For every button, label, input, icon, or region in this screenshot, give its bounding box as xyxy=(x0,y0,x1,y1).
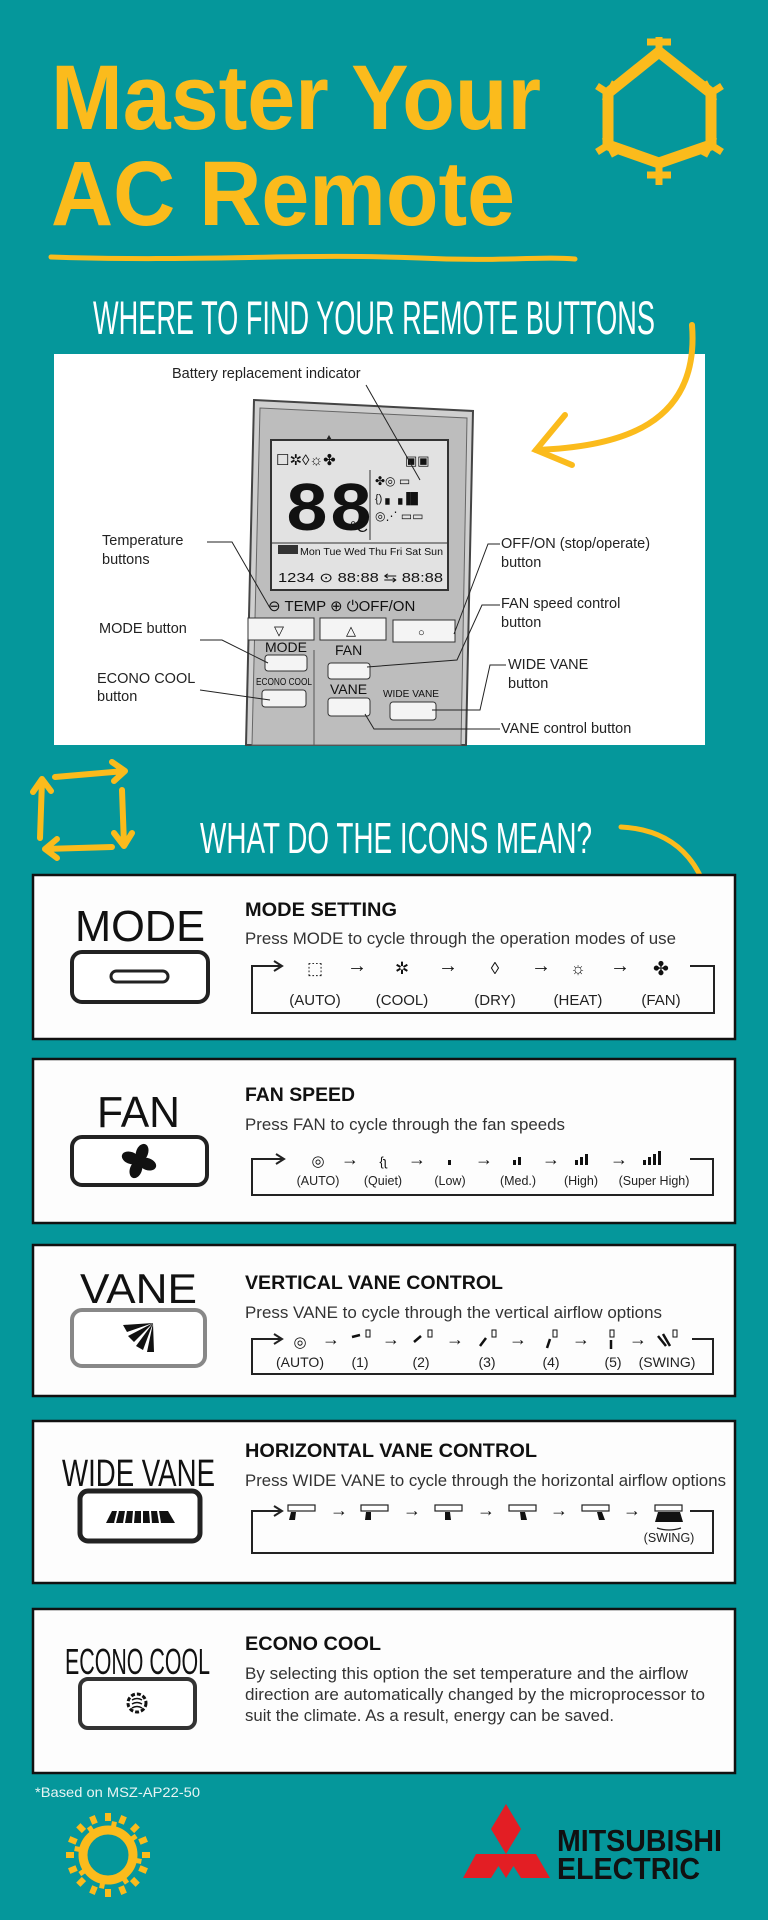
icon: sun xyxy=(66,1813,150,1897)
remote body: ☐✲◊☼✤ xyxy=(276,452,336,469)
mode button icon xyxy=(72,902,208,1002)
mode flow: → xyxy=(610,955,630,977)
mode button icon: MODE xyxy=(75,902,205,951)
fan flow: (Super High) xyxy=(619,1174,689,1188)
fan flow: → xyxy=(542,1149,560,1169)
mode flow: ✤ xyxy=(653,959,669,980)
callout labels: Temperature xyxy=(102,533,183,549)
remote body: ECONO COOL xyxy=(256,677,312,688)
panel: econo cool xyxy=(33,1609,735,1773)
wide vane flow: → xyxy=(550,1500,568,1520)
remote logo: MITSUBISHI xyxy=(354,442,400,451)
wide vane flow: (SWING) xyxy=(644,1531,694,1545)
mode flow: (COOL) xyxy=(376,992,428,1009)
panel: remote diagram xyxy=(54,354,705,745)
callout labels: button xyxy=(501,615,541,631)
remote body: 1234 ⊙ 88:88 ⇆ 88:88 xyxy=(278,570,443,585)
remote body: ◎⋰ ▭▭ xyxy=(375,509,423,523)
remote body: ▽ xyxy=(274,623,284,638)
vane flow: (4) xyxy=(542,1354,560,1370)
remote body: ✤◎ ▭ xyxy=(375,474,410,488)
vane flow xyxy=(252,1329,713,1374)
callout labels: WIDE VANE xyxy=(508,657,589,673)
panel: fan speed: Press FAN to cycle through the fan speeds xyxy=(245,1116,565,1134)
panel: vertical vane control xyxy=(33,1245,735,1396)
callout labels: OFF/ON (stop/operate) xyxy=(501,536,650,552)
vane flow: (2) xyxy=(412,1354,430,1370)
mode flow: (AUTO) xyxy=(289,992,341,1009)
fan flow: (Quiet) xyxy=(364,1174,402,1188)
callout labels: buttons xyxy=(102,552,150,568)
fan text: FAN SPEED xyxy=(245,1085,355,1106)
remote body: VANE xyxy=(330,681,367,697)
callout labels: button xyxy=(501,555,541,571)
remote body xyxy=(246,400,473,745)
callout labels: button xyxy=(97,689,137,705)
panel: horizontal vane control: Press WIDE VANE to cycle through the horizontal airflow options xyxy=(245,1472,726,1490)
arrow: curved pointing to remote xyxy=(536,325,693,465)
vane flow: (AUTO) xyxy=(276,1354,324,1370)
wide vane flow: → xyxy=(623,1500,641,1520)
wide vane flow xyxy=(252,1500,713,1553)
remote body: ○ xyxy=(418,627,425,639)
vane flow: (1) xyxy=(351,1354,369,1370)
vane button icon: VANE xyxy=(80,1265,197,1312)
panel: econo cool: direction are automatically changed by the microprocessor to xyxy=(245,1686,705,1704)
callout labels: Battery replacement indicator xyxy=(172,366,361,382)
mode flow: ☼ xyxy=(570,959,586,978)
vane flow: (5) xyxy=(604,1354,622,1370)
icon: cycle arrows xyxy=(33,762,132,858)
panel: econo cool: By selecting this option the set temperature and the airflow xyxy=(245,1665,688,1683)
fan flow: (Med.) xyxy=(500,1174,536,1188)
icon: snowflake hexagon xyxy=(597,37,722,185)
wide vane button icon xyxy=(62,1453,215,1541)
mode flow: → xyxy=(438,955,458,977)
vane flow: → xyxy=(572,1329,590,1349)
title underline xyxy=(51,256,575,259)
callout labels xyxy=(97,366,650,737)
remote body: △ xyxy=(346,623,356,638)
vane flow: (SWING) xyxy=(639,1354,695,1370)
remote logo xyxy=(319,435,400,451)
remote body: {) ▖▗▐█ xyxy=(375,491,418,506)
vane flow: → xyxy=(322,1329,340,1349)
wide vane flow: → xyxy=(403,1500,421,1520)
mode flow: (FAN) xyxy=(641,992,681,1009)
callout labels: button xyxy=(508,676,548,692)
vane flow: → xyxy=(509,1329,527,1349)
remote body: WIDE VANE xyxy=(383,689,439,700)
mode flow: (DRY) xyxy=(474,992,516,1009)
title: Master Your xyxy=(51,47,541,149)
fan flow: (Low) xyxy=(434,1174,466,1188)
fan flow: → xyxy=(475,1149,493,1169)
mode flow: (HEAT) xyxy=(554,992,602,1009)
econo cool button icon: ECONO COOL xyxy=(65,1641,210,1682)
fan flow: → xyxy=(610,1149,628,1169)
vane text: VERTICAL VANE CONTROL xyxy=(245,1273,503,1294)
logo: mitsubishi electric xyxy=(463,1804,722,1886)
mode flow: → xyxy=(347,955,367,977)
callout labels: MODE button xyxy=(99,621,187,637)
vane flow: (3) xyxy=(478,1354,496,1370)
panel: mode setting: Press MODE to cycle through the operation modes of use xyxy=(245,930,676,948)
mode text: MODE SETTING xyxy=(245,900,397,921)
arrow: curved pointing to panels xyxy=(621,827,720,935)
title xyxy=(51,47,541,245)
fan flow: ◎ xyxy=(311,1153,325,1170)
callout labels: VANE control button xyxy=(501,721,631,737)
fan flow: → xyxy=(408,1149,426,1169)
vane button icon xyxy=(72,1265,205,1366)
panel: vertical vane control: Press VANE to cycle through the vertical airflow options xyxy=(245,1304,662,1322)
mode flow: ✲ xyxy=(395,959,409,978)
wide vane button icon: WIDE VANE xyxy=(62,1453,215,1495)
fan button icon xyxy=(72,1088,207,1185)
fan button icon: FAN xyxy=(97,1088,180,1137)
vane flow: → xyxy=(446,1329,464,1349)
mode flow xyxy=(252,955,714,1013)
callout labels: ECONO COOL xyxy=(97,671,195,687)
panel: fan speed xyxy=(33,1059,735,1223)
fan flow xyxy=(252,1149,713,1195)
remote body: Mon Tue Wed Thu Fri Sat Sun xyxy=(300,547,443,558)
panel: mode setting xyxy=(33,875,735,1039)
fan flow: (AUTO) xyxy=(297,1174,339,1188)
screen xyxy=(271,440,448,590)
panel: horizontal vane control xyxy=(33,1421,735,1583)
remote body: ▣▣ xyxy=(405,453,430,468)
mode flow: → xyxy=(531,955,551,977)
logo: mitsubishi electric: MITSUBISHI xyxy=(557,1823,722,1858)
footnote: *Based on MSZ-AP22-50 xyxy=(35,1784,200,1800)
vane flow: → xyxy=(382,1329,400,1349)
econo cool button icon xyxy=(65,1641,210,1728)
remote body: FAN xyxy=(335,642,362,658)
mode flow: ◊ xyxy=(491,959,500,978)
wide vane flow: → xyxy=(477,1500,495,1520)
leader lines xyxy=(200,385,506,729)
remote body: °C xyxy=(350,519,368,536)
vane flow: ◎ xyxy=(293,1334,307,1351)
remote body: MODE xyxy=(265,639,307,655)
econo cool text: ECONO COOL xyxy=(245,1634,381,1655)
callout labels: FAN speed control xyxy=(501,596,620,612)
fan flow: (High) xyxy=(564,1174,598,1188)
temp labels: ⊖ TEMP ⊕ ⏻OFF/ON xyxy=(268,598,415,615)
fan flow: → xyxy=(341,1149,359,1169)
fan flow: {ʅ xyxy=(379,1154,388,1169)
wide vane flow: → xyxy=(330,1500,348,1520)
logo: mitsubishi electric: ELECTRIC xyxy=(557,1851,700,1886)
wide vane text: HORIZONTAL VANE CONTROL xyxy=(245,1441,537,1462)
mode flow: ⬚ xyxy=(307,959,323,978)
remote body: 88 xyxy=(285,473,373,552)
title: AC Remote xyxy=(51,143,515,245)
vane flow: → xyxy=(629,1329,647,1349)
panel: econo cool: suit the climate. As a result, energy can be saved. xyxy=(245,1707,614,1725)
